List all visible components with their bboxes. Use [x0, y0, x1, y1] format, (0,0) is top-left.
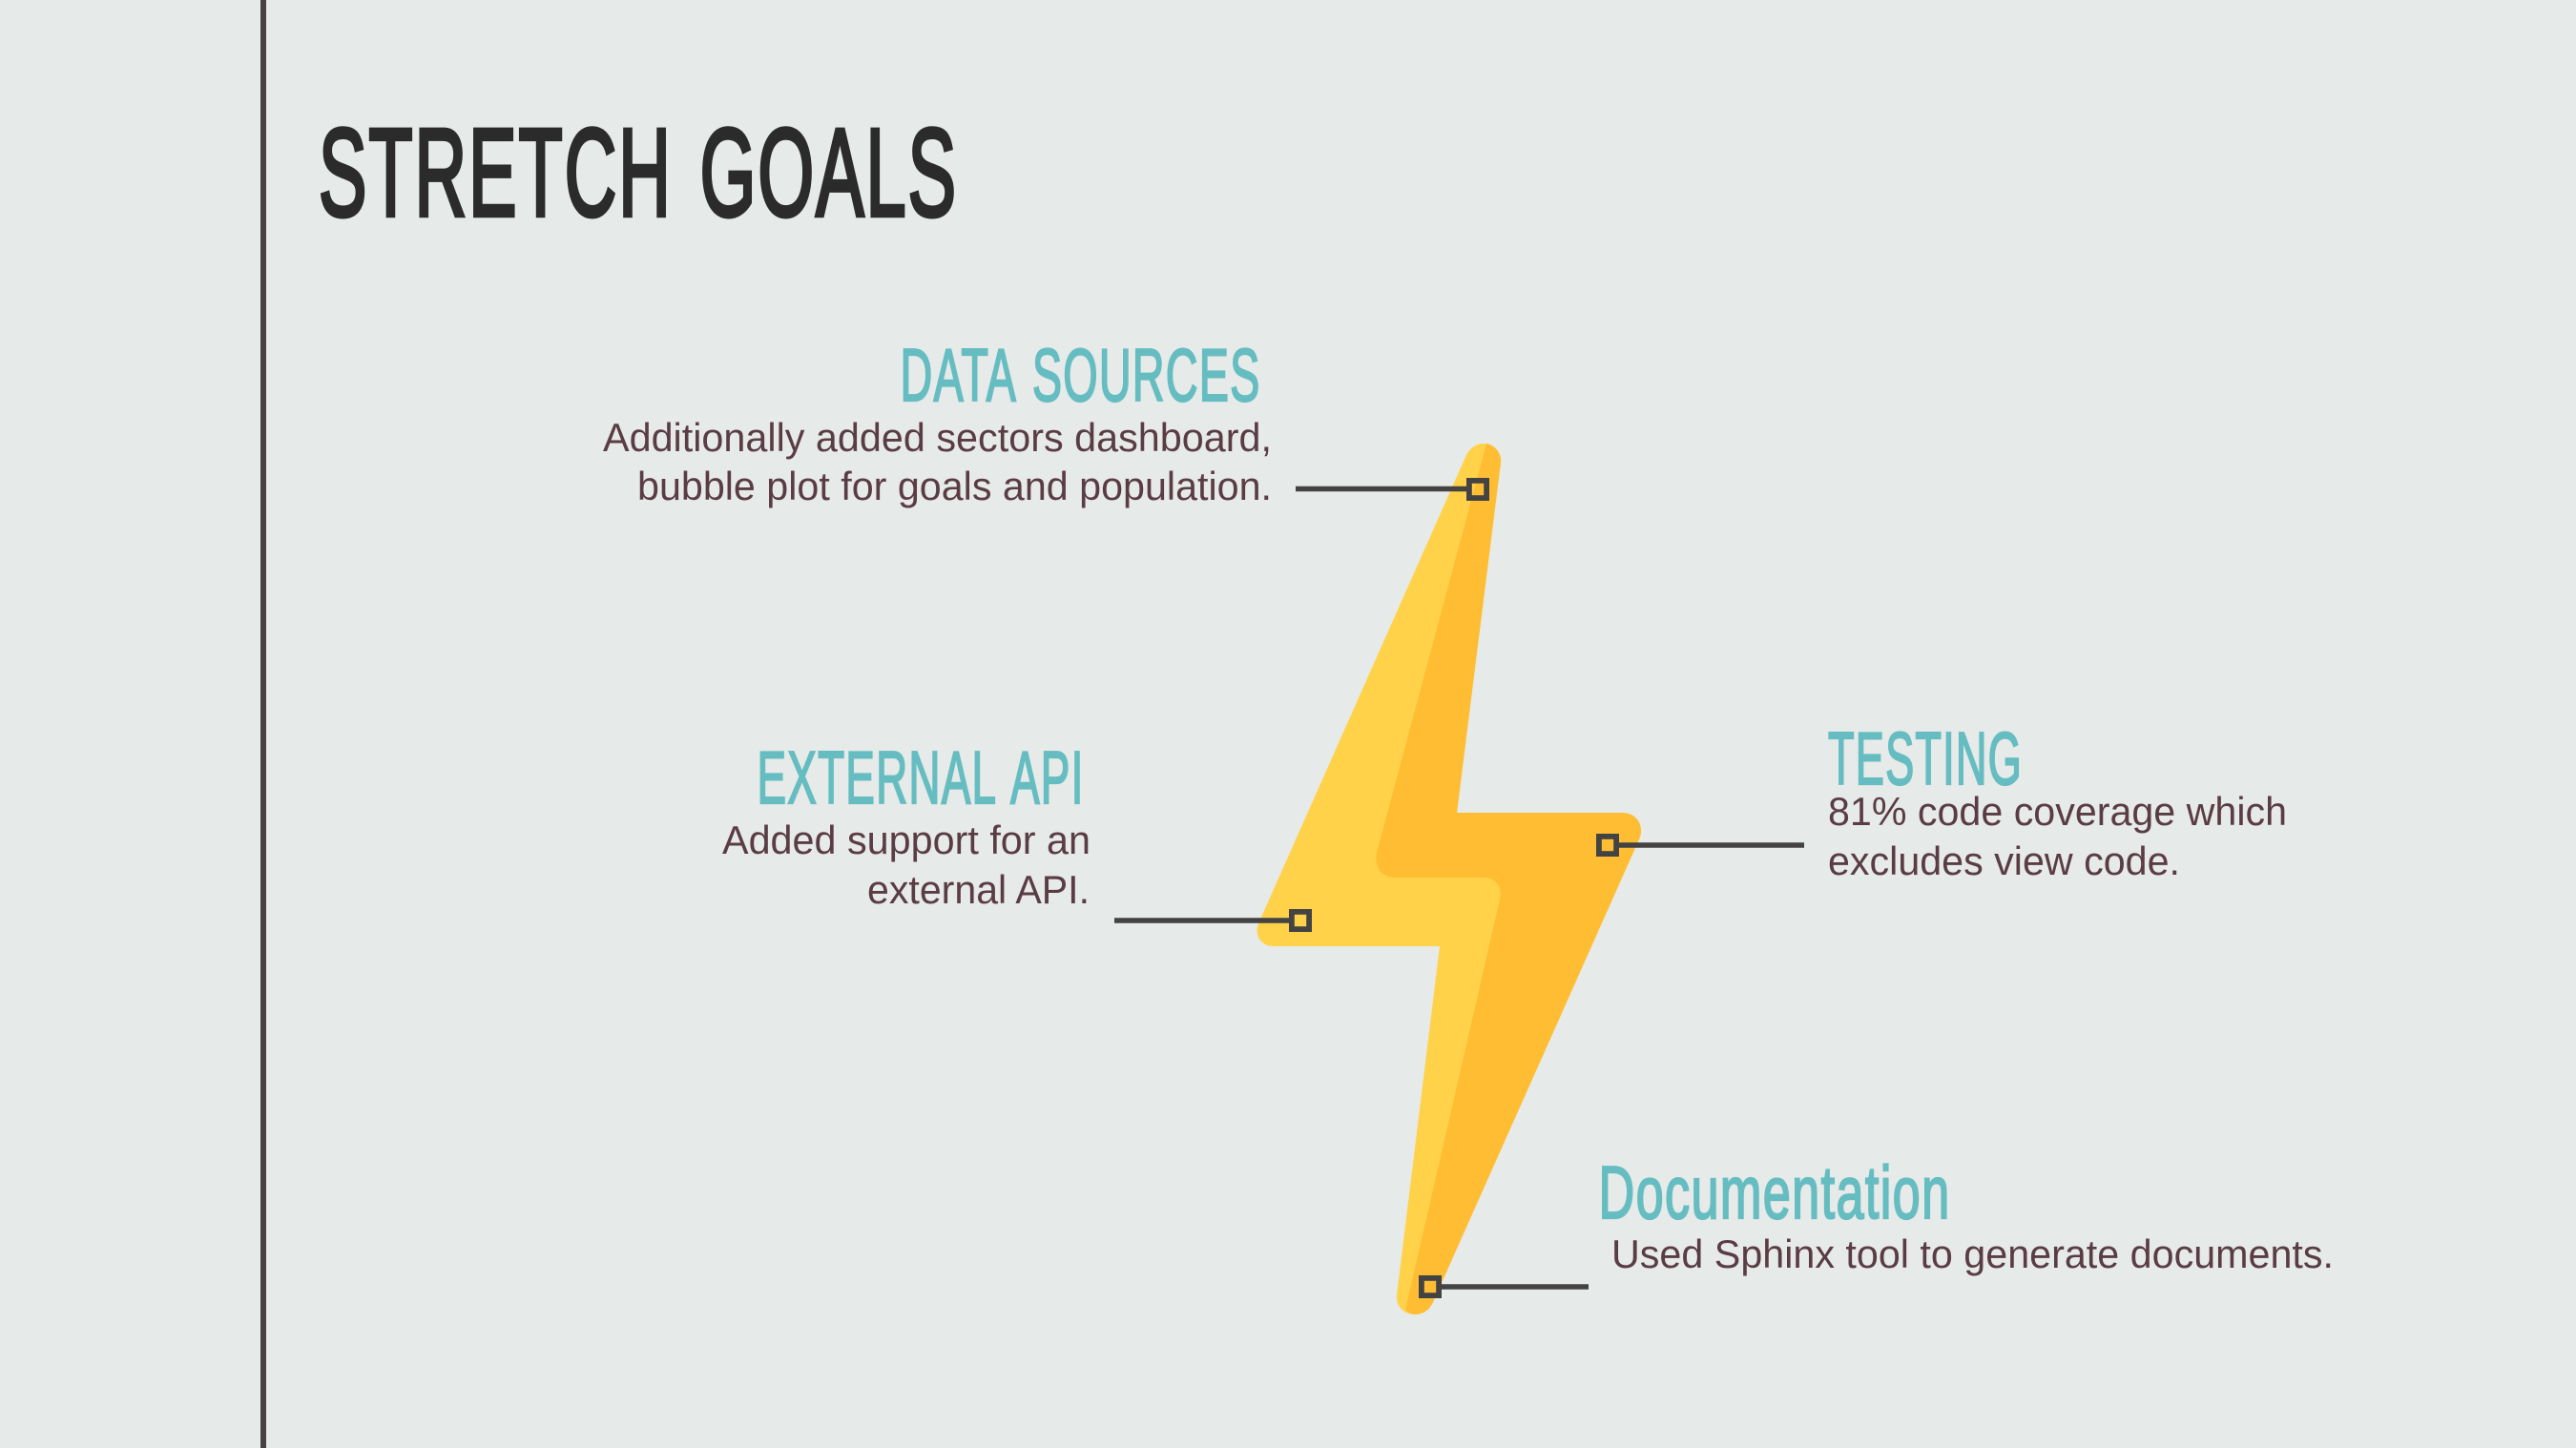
text block: data sources: bubble plot for goals and population. [637, 464, 1272, 508]
text block: testing: 81% code coverage which [1828, 789, 2287, 834]
text block: external api: external API. [867, 867, 1090, 912]
text block: documentation: Used Sphinx tool to generate documents. [1611, 1231, 2334, 1276]
connector: data sources [1296, 481, 1486, 498]
text block: external api: Added support for an [722, 817, 1091, 862]
title: STRETCH GOALS [319, 102, 958, 242]
icon: lightning bolt [1257, 444, 1641, 1314]
heading: data sources: DATA SOURCES [901, 333, 1261, 417]
heading: external api: EXTERNAL API [758, 735, 1084, 819]
heading: testing: TESTING [1828, 716, 2023, 800]
connector: documentation [1422, 1278, 1589, 1295]
connector: external api [1114, 912, 1309, 929]
text block: testing: excludes view code. [1828, 838, 2180, 883]
text block: data sources: Additionally added sectors dashboard, [603, 415, 1272, 460]
connector: testing [1599, 837, 1804, 854]
vertical rule [260, 0, 266, 1448]
heading: documentation: Documentation [1599, 1150, 1950, 1234]
